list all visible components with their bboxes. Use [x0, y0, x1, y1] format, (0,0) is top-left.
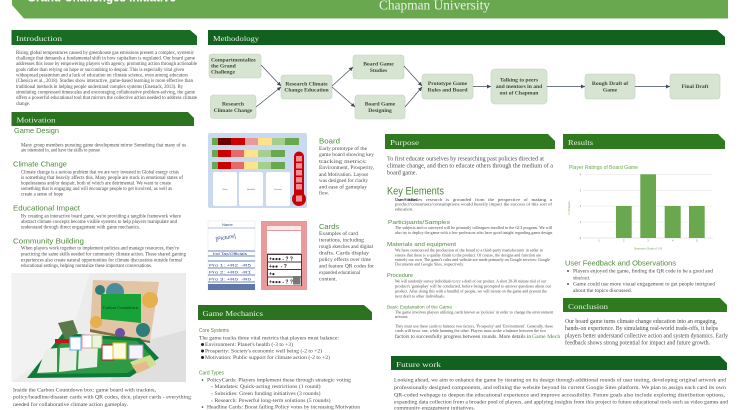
flow box: research climate change education	[281, 75, 332, 99]
prosperity tracker	[212, 150, 285, 157]
community building block: Community Building	[13, 236, 84, 246]
materials text	[395, 247, 550, 268]
introduction text	[16, 51, 197, 107]
procedure text: next draft to other individuals.	[395, 293, 445, 298]
card types	[199, 370, 361, 410]
game design block: Many group members pursuing game development mirror Something that many of us	[21, 143, 186, 148]
environment tracker	[212, 138, 299, 145]
game mechanics link line: factors to successfully progress between rounds. More details in	[395, 333, 531, 340]
educational impact block: Educational Impact	[13, 204, 81, 212]
climate change block: create a sense of hope	[21, 193, 63, 198]
card deck	[58, 320, 78, 339]
panel: board prototype image	[208, 133, 307, 208]
educational impact block: abstract climate concepts become visible systems to help players manipulate and	[21, 220, 178, 225]
flow box: compartmentalize	[209, 54, 261, 78]
introduction text: Rising global temperatures caused by greenhouse gas emissions present a complex, systemic	[16, 51, 194, 56]
introduction text: change.	[16, 102, 30, 107]
bar chart: player ratings: 2	[580, 204, 582, 208]
purpose text	[387, 156, 553, 176]
conclusion text: players better understand collective action and system dynamics. Early	[565, 333, 728, 339]
board description: and ease of gameplay	[319, 186, 368, 190]
panel: motivation	[12, 112, 194, 269]
basic explanation heading: Basic Explanation of the Game	[387, 304, 453, 309]
procedure text	[395, 279, 552, 298]
future work text: QR-coded webpage to deepen the educational experience and improve accessibility. Future goals also include exploring distribution options,	[394, 393, 725, 398]
heading: results: Results	[568, 138, 593, 147]
cards description: Examples of card	[319, 232, 359, 237]
photo: board game contents	[12, 273, 186, 382]
basic explanation text	[395, 309, 554, 334]
bar chart: player ratings: 0	[580, 236, 582, 240]
flow box: research climate change education: Research Climate	[285, 82, 328, 88]
panel: methodology	[208, 30, 725, 119]
sketch card: Ind Tax/Officials	[213, 252, 247, 256]
participants heading: Participants/Samples	[388, 220, 450, 226]
heading: conclusion	[563, 298, 727, 312]
photo caption: policy/headline/disaster cards with QR codes, dice, player cards - everything	[13, 395, 191, 401]
user feedback bullets: Game could use more visual engagement to get people intrigued	[573, 282, 716, 288]
heading: future work: Future work	[396, 360, 441, 369]
participants text	[395, 225, 553, 235]
bar chart: player ratings: 4	[672, 238, 674, 242]
flow box: board game designing: Board Game	[365, 102, 396, 108]
policy cards	[70, 335, 157, 374]
flow box: research climate change: Research	[222, 102, 245, 108]
flow box: compartmentalize: Challenge	[211, 70, 235, 76]
basic explanation text: The game involves players utilizing cards known as 'policies' in order to change the environment	[395, 309, 554, 314]
flow box: talking to peers	[491, 69, 547, 104]
climate change block: Climate Change	[13, 160, 67, 168]
core systems	[199, 328, 339, 361]
panel: future work	[391, 356, 729, 410]
conclusion text: hands-on experience. By simulating real-world trade-offs, it helps	[565, 325, 719, 332]
panel: purpose	[385, 134, 572, 340]
flow box: board game studies: Board Game	[363, 62, 394, 68]
participants text: also try to deploy the game with a few professors who have good insight regarding game design.	[395, 230, 553, 235]
flow box: board game studies	[353, 55, 404, 79]
materials text: Documents and Google Sites, respectively.	[395, 262, 464, 268]
conclusion text: Our board game turns climate change education into an engaging,	[565, 319, 718, 325]
cards description: policy effects over time	[319, 258, 372, 263]
board description: Board	[319, 136, 340, 146]
digital card: +●●● - ? ?	[269, 256, 293, 262]
cards description	[319, 222, 374, 282]
heading: results	[563, 134, 725, 149]
board description: Environment, Prosperity,	[319, 166, 374, 171]
climate change block	[13, 160, 183, 198]
materials text: entirely our own. The game's rules and website are made primarily on Google services: Google	[395, 257, 550, 262]
basic explanation text: and economy.	[395, 314, 408, 319]
card slots: Policy	[222, 189, 228, 191]
heading: methodology	[208, 30, 725, 45]
conclusion text	[565, 319, 728, 347]
future work text: professionally designed components, and refining the website beyond its current Google Sites platform. We plan to assign each card its own	[394, 386, 727, 391]
flow box: prototype: Rules and Board	[427, 88, 468, 94]
flow box: talking to peers: out of Chapman	[500, 90, 539, 96]
sketch card: Pro 3: +R0 -R0	[209, 276, 252, 282]
cards description: content.	[319, 278, 337, 282]
thermometer	[292, 152, 306, 206]
core systems: The game tracks three vital metrics that players must balance:	[199, 336, 339, 342]
card slots: Headline	[247, 189, 256, 191]
bar chart: player ratings	[567, 165, 713, 250]
bar chart: player ratings: 3	[647, 238, 649, 242]
bar chart: player ratings: 1	[580, 220, 582, 224]
participants text: The subjects and or surveyed will be primarily colleagues enrolled in the GCI program. We will	[395, 225, 553, 230]
board description: game board showing key	[319, 153, 375, 158]
game box	[90, 280, 159, 343]
introduction text: widespread pessimism and a lack of education on climate science, even among educators	[16, 74, 188, 78]
card slots	[213, 172, 290, 206]
bar chart: player ratings: 2	[623, 238, 625, 242]
board description: flow.	[319, 192, 329, 196]
flow box: board game designing: Designing	[368, 108, 392, 114]
cards description: expanded educational	[319, 271, 361, 276]
basic explanation text: They must use these cards to balance two factors, 'Prosperity' and 'Environment'. Generally, these	[395, 323, 553, 329]
flow box: compartmentalize: Compartmentalize	[211, 58, 256, 64]
board description: was designed for clarity	[319, 179, 369, 184]
heading: introduction	[12, 30, 197, 45]
card types: o	[211, 398, 213, 402]
future work text	[394, 379, 729, 410]
digital card	[261, 221, 307, 290]
core systems: Motivation: Public support for climate action (-2 to +2)	[205, 356, 330, 361]
introduction text: (Chesica et al., 2018). Studies show interactive, game-based learning is more effective than	[16, 79, 194, 84]
user feedback heading: User Feedback and Observations	[565, 260, 677, 268]
cards description: drafts. Cards display	[319, 252, 370, 256]
sketch card: Name	[222, 222, 233, 227]
flow box: talking to peers: Talking to peers	[500, 78, 539, 84]
digital card: +●	[269, 272, 275, 278]
heading: game mechanics: Game Mechanics	[202, 309, 263, 318]
digital card: +●● - ?	[269, 264, 287, 270]
heading: methodology: Methodology	[213, 34, 259, 43]
user studies text	[395, 197, 553, 212]
motivation tracker	[212, 162, 285, 169]
header banner	[12, 0, 728, 18]
card types: Subsidies: Green funding initiatives (3 rounds)	[214, 392, 321, 397]
procedure heading: Procedure	[387, 273, 413, 279]
photo caption: needed for collaborative climate action gameplay.	[13, 401, 129, 408]
user studies text: User Studies	[395, 197, 417, 202]
flow box: final draft	[670, 74, 720, 99]
community building block: practicing the same skills needed for community climate action. These shared gaming	[21, 253, 187, 258]
flow box: rough draft	[585, 74, 635, 99]
heading: purpose	[385, 134, 555, 149]
procedure text: product's 'gameplay' will be conducted, before being prompted to answer questions about our	[395, 283, 552, 289]
procedure text: product. After doing this with a handful of people, we will iterate on the game and present the	[395, 288, 547, 294]
photo caption: Inside the Carbon Countdown box: game board with trackers,	[13, 388, 157, 394]
bar chart: player ratings: 5	[696, 238, 698, 242]
basic explanation text: cards will favor one, while harming the other. Players must strike a balance between the two	[395, 328, 546, 334]
sketch card: Pro 1: +R2 -R5	[209, 262, 252, 268]
educational impact block: understand through direct engagement with game mechanics.	[21, 226, 140, 231]
board description: Early prototype of the	[319, 147, 368, 152]
flow box: compartmentalize: the Grand	[211, 64, 237, 70]
flow box: talking to peers: and mentors in and	[496, 84, 543, 90]
materials text: We have outsourced the production of the board to a third-party manufacturer in order to	[395, 247, 543, 252]
card types: Card Types	[199, 370, 224, 376]
flow box: board game studies: Studies	[370, 68, 388, 74]
materials text: ensure that there is a quality finish to the product. Of course, the designs and function are	[395, 252, 541, 258]
community building block	[13, 236, 187, 269]
future work text: expanding data collection from a broader pool of players, and applying insights from this project to future educational tools such as video games and	[394, 400, 729, 405]
user feedback bullets: Players enjoyed the game, finding the QR code to be a good and	[573, 270, 714, 274]
community building block: educational settings, helping normalize these important conversations.	[21, 264, 152, 269]
user feedback bullets	[567, 270, 716, 294]
community building block: experiences also create natural opportunities for climate discussions outside formal	[21, 258, 183, 263]
photo caption	[13, 388, 191, 408]
flowchart	[209, 54, 720, 119]
panel: results	[563, 134, 725, 294]
introduction text: challenge that demands a fundamental shift in how capitalism is regulated. Our board game	[16, 56, 195, 61]
bar chart: player ratings: 3	[580, 188, 582, 192]
introduction text: offers a powerful educational tool that mirrors the collective action needed to address climate	[16, 96, 197, 101]
cards description: Cards	[319, 222, 339, 231]
cards description: iterations, including	[319, 238, 365, 244]
board description: tracking metrics:	[319, 160, 367, 165]
sketch card: [Picture]	[215, 233, 237, 243]
climate change block: Climate change is a serious problem that we are very invested in Global energy crisis	[21, 170, 179, 175]
flow box: rough draft: Rough Draft of	[592, 81, 628, 87]
game design block: are interested in, and have the skills to pursue	[21, 149, 100, 154]
flow box: board game designing	[355, 95, 405, 119]
user feedback bullets: refined touch.	[573, 276, 590, 282]
cards description: and feature QR codes for	[319, 264, 374, 270]
introduction text: simulating compressed timescales and encouraging collaborative problem-solving, the game	[16, 90, 195, 96]
user studies text: product/consumers/consumptions would heavily impact the success of this sort of	[395, 202, 553, 207]
panel: introduction	[12, 30, 197, 107]
heading: purpose: Purpose	[390, 138, 420, 147]
flow box: research climate change	[210, 95, 256, 118]
cards description: rough sketches and digital	[319, 245, 374, 250]
flow box: rough draft: Game	[603, 88, 618, 94]
flow box: final draft: Final Draft	[682, 84, 709, 90]
core systems: Prosperity: Society's economic well being (-2 to +2)	[205, 350, 322, 354]
introduction text: addresses this issue by empowering players with agency, promoting action through actionable	[16, 62, 197, 67]
climate change block: hopelessness and/or despair, both of which are detrimental. We want to create	[21, 181, 171, 186]
heading: game mechanics	[198, 305, 372, 320]
board description: and Motivation. Layout	[319, 173, 369, 178]
climate change block: something that is engaging and will encourage people to get involved, as well as	[21, 187, 172, 192]
purpose text: climate change, and then to educate others through the medium of a	[387, 162, 553, 170]
game design block	[14, 126, 186, 154]
card types: Mandates: Quick-acting restrictions (1 round)	[214, 385, 321, 390]
heading: future work	[391, 356, 727, 370]
educational impact block	[13, 204, 181, 231]
game board mat	[27, 333, 159, 378]
procedure text: We will randomly survey individuals to try a draft of our product. A short 20-30 minute trial of our	[395, 279, 547, 284]
introduction text: goals rather than relying on hope or succumbing to despair. This is especially vital given	[16, 68, 185, 73]
flow box: research climate change education: Change Education	[284, 88, 330, 94]
bar chart: player ratings: Statement (Scale of 1-5)	[634, 246, 662, 250]
heading: motivation	[12, 112, 194, 126]
bar chart: player ratings: 1	[598, 238, 600, 242]
user feedback bullets: about the topics discussed.	[573, 289, 632, 294]
sketch card	[208, 221, 255, 290]
materials heading: Materials and equipment	[387, 242, 456, 248]
flow box: prototype	[422, 74, 473, 99]
user studies text: User Studies research is grounded from the perspective of making a	[395, 197, 552, 202]
heading: introduction: Introduction	[16, 34, 62, 43]
future work text: Looking ahead, we aim to enhance the game by iterating on its design through additional rounds of user testing, developing original artwork and	[394, 379, 727, 384]
conclusion text: feedback shows strong potential for impact and future growth.	[565, 340, 711, 347]
flow box: prototype: Prototype Game	[428, 81, 468, 87]
game box: Carbon Countdown	[103, 305, 139, 310]
chart title: Player Ratings of Board Game	[569, 165, 638, 171]
heading: motivation: Motivation	[16, 116, 56, 124]
community building block: When players work together to implement policies and manage resources, they're	[21, 247, 179, 252]
climate change block: is something that heavily affects this. Many people are stuck in emotional states of	[21, 176, 183, 181]
card types: Research: Powerful long-term solutions (5 rounds)	[214, 399, 331, 404]
game design block: Game Design	[14, 126, 59, 135]
key elements heading: Key Elements	[387, 186, 444, 198]
heading: conclusion: Conclusion	[568, 302, 608, 311]
card slots: Disaster	[274, 188, 282, 191]
bar chart: player ratings: # of Players	[567, 200, 571, 215]
arrows	[256, 65, 670, 107]
panel: conclusion	[563, 298, 728, 347]
board description	[319, 136, 375, 196]
card types: o	[211, 384, 213, 388]
card types: o	[211, 392, 213, 396]
panel: game mechanics	[198, 305, 372, 410]
core systems: Core Systems	[199, 328, 229, 334]
game mechanics link line: Game Mechanics	[532, 334, 572, 340]
user studies text: education.	[395, 207, 413, 212]
card types: PolicyCards: Players implement these through strategic voting	[207, 378, 352, 384]
introduction text: traditional methods in helping people understand complex systems (Eisenack, 2013). By	[16, 85, 184, 90]
bar chart: player ratings: 4	[580, 172, 582, 176]
digital card: +●●● - ? ?	[269, 280, 293, 286]
flow box: research climate change: Climate Change	[214, 108, 253, 114]
purpose text: board game.	[387, 170, 418, 176]
educational impact block: By creating an interactive board game, we're providing a tangible framework where	[21, 214, 181, 219]
core systems: Environment: Planet's health (-3 to +3)	[205, 343, 293, 348]
purpose text: To first educate ourselves by researching past policies directed at	[387, 156, 544, 162]
sketch card: Pro 2: +R0 -R1	[209, 270, 252, 274]
